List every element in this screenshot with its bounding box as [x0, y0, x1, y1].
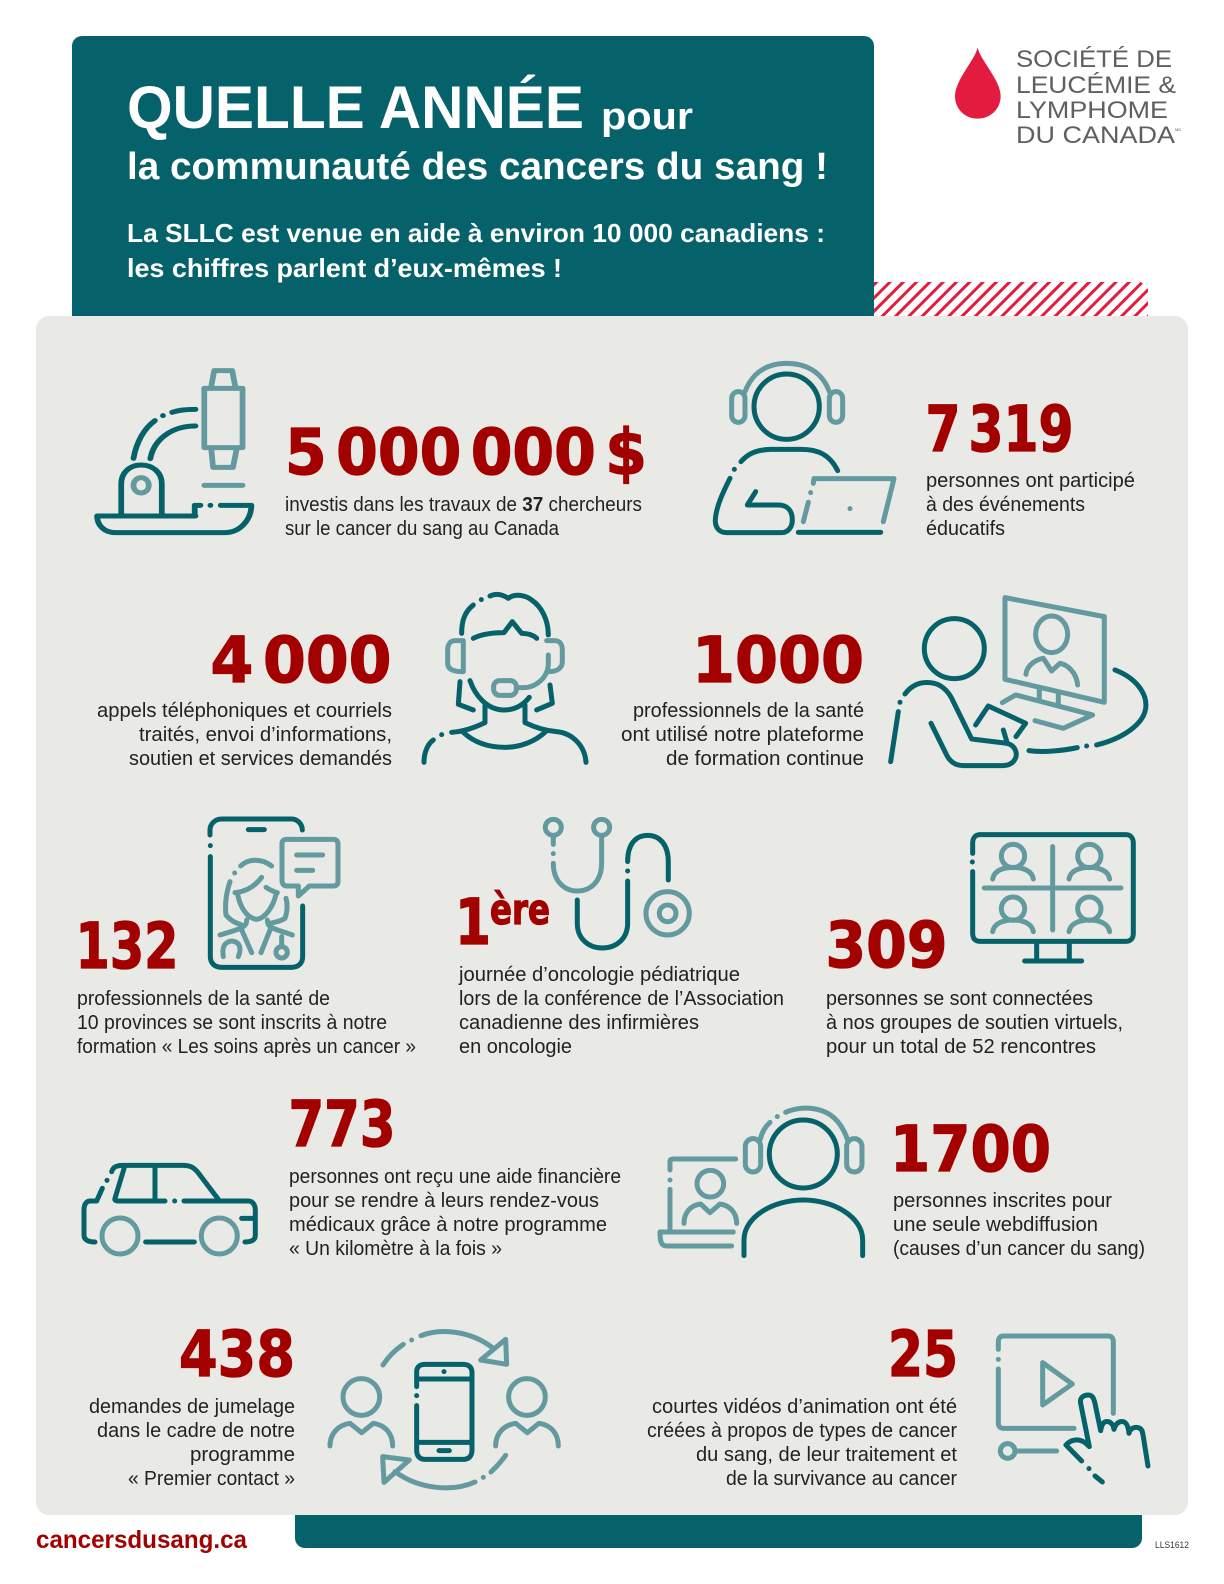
description: personnes ont reçu une aide financière — [289, 1166, 621, 1188]
stat: 1000 — [621, 598, 1146, 770]
title: QUELLE ANNÉE — [127, 74, 584, 141]
icon: person at desktop computer — [891, 598, 1146, 766]
logo wordmark: LYMPHOME — [1016, 97, 1168, 124]
description: soutien et services demandés — [129, 748, 392, 770]
description: de formation continue — [666, 748, 864, 770]
logo wordmark: MD — [1175, 127, 1181, 132]
logo wordmark — [1016, 46, 1181, 149]
description: appels téléphoniques et courriels — [97, 700, 392, 722]
stat: 438 — [89, 1318, 558, 1490]
subtitle — [127, 218, 825, 283]
number: 7 319 — [926, 393, 1074, 466]
description: courtes vidéos d’animation ont été — [652, 1396, 957, 1418]
number: 4 000 — [210, 624, 392, 697]
stat: 1ère — [455, 819, 784, 1058]
description — [621, 700, 864, 770]
website link: cancersdusang.ca — [36, 1526, 248, 1554]
description — [647, 1396, 957, 1490]
description — [893, 1190, 1145, 1260]
main panel — [36, 316, 1188, 1515]
title: la communauté des cancers du sang ! — [127, 146, 828, 188]
header banner — [72, 36, 874, 316]
icon: person watching webcast — [660, 1108, 863, 1256]
number: ère — [490, 885, 550, 934]
description: (causes d’un cancer du sang) — [893, 1238, 1145, 1260]
description: sur le cancer du sang au Canada — [285, 518, 560, 540]
description: journée d’oncologie pédiatrique — [458, 964, 740, 986]
icon: microscope — [97, 371, 251, 533]
icon: stethoscope — [545, 819, 689, 948]
description: du sang, de leur traitement et — [696, 1444, 957, 1466]
stat: 309 — [826, 835, 1133, 1058]
document code: LLS1612 — [1155, 1540, 1189, 1551]
description: demandes de jumelage — [89, 1396, 295, 1418]
stat: 25 — [647, 1318, 1148, 1490]
icon: doctor on phone with chat bubble — [210, 819, 338, 967]
description: formation « Les soins après un cancer » — [77, 1036, 416, 1058]
description: « Premier contact » — [128, 1468, 295, 1490]
icon: video meeting on monitor — [972, 835, 1133, 961]
number: 309 — [826, 909, 948, 982]
logo wordmark: SOCIÉTÉ DE — [1016, 46, 1172, 73]
logo wordmark: LEUCÉMIE & — [1016, 72, 1176, 99]
description — [89, 1396, 295, 1490]
description — [458, 964, 784, 1058]
description: créées à propos de types de cancer — [647, 1420, 957, 1442]
number — [455, 885, 550, 959]
description: traités, envoi d’informations, — [139, 724, 392, 746]
number: 1700 — [890, 1113, 1051, 1186]
icon: video player with pointing hand — [998, 1336, 1148, 1482]
description: investis dans les travaux de 37 chercheurs — [285, 494, 642, 516]
description: en oncologie — [459, 1036, 572, 1058]
icon: blood drop — [955, 47, 1001, 119]
description — [97, 700, 392, 770]
footer bar — [295, 1515, 1142, 1548]
description: pour se rendre à leurs rendez-vous — [289, 1190, 599, 1212]
stat: 5 000 000 $ — [97, 371, 647, 540]
subtitle: les chiffres parlent d’eux-mêmes ! — [127, 253, 562, 283]
description: une seule webdiffusion — [893, 1214, 1098, 1236]
description: à des événements — [926, 494, 1085, 516]
number: 438 — [179, 1318, 295, 1391]
number: 1000 — [692, 624, 864, 697]
description — [826, 988, 1123, 1058]
description: dans le cadre de notre — [97, 1420, 295, 1442]
description — [926, 470, 1135, 540]
description: « Un kilomètre à la fois » — [289, 1238, 502, 1260]
description: programme — [190, 1444, 295, 1466]
description: éducatifs — [926, 518, 1005, 540]
logo — [955, 46, 1181, 149]
subtitle: La SLLC est venue en aide à environ 10 000 canadiens : — [127, 218, 825, 248]
title — [127, 74, 828, 188]
description: 10 provinces se sont inscrits à notre — [77, 1012, 387, 1034]
number: 132 — [76, 910, 178, 983]
description: ont utilisé notre plateforme — [621, 724, 864, 746]
description: personnes ont participé — [926, 470, 1135, 492]
logo wordmark: DU CANADA — [1016, 122, 1176, 149]
description: à nos groupes de soutien virtuels, — [826, 1012, 1123, 1034]
description — [77, 988, 416, 1058]
description — [289, 1166, 621, 1260]
number: 773 — [288, 1088, 396, 1161]
description: lors de la conférence de l’Association — [459, 988, 784, 1010]
description: médicaux grâce à notre programme — [289, 1214, 607, 1236]
icon: phone between two people with arrows — [330, 1332, 558, 1488]
description: personnes inscrites pour — [893, 1190, 1112, 1212]
description — [285, 494, 642, 540]
description: personnes se sont connectées — [826, 988, 1093, 1010]
description: professionnels de la santé de — [77, 988, 330, 1010]
stat: 4 000 — [97, 594, 586, 770]
stat: 132 — [76, 819, 416, 1058]
icon: call agent with headset — [424, 594, 586, 762]
decorative red stripes — [874, 282, 1148, 316]
icon: car — [84, 1165, 255, 1254]
stat: 773 — [84, 1088, 621, 1260]
description: canadienne des infirmières — [459, 1012, 699, 1034]
number: 25 — [888, 1318, 958, 1391]
description: pour un total de 52 rencontres — [826, 1036, 1096, 1058]
icon: person with headset and laptop — [715, 363, 894, 533]
stat: 1700 — [660, 1108, 1145, 1260]
description: professionnels de la santé — [633, 700, 864, 722]
stat: 7 319 — [715, 363, 1135, 540]
title: pour — [601, 96, 693, 138]
description: de la survivance au cancer — [726, 1468, 957, 1490]
number: 1 — [455, 886, 491, 959]
number: 5 000 000 $ — [285, 416, 647, 489]
